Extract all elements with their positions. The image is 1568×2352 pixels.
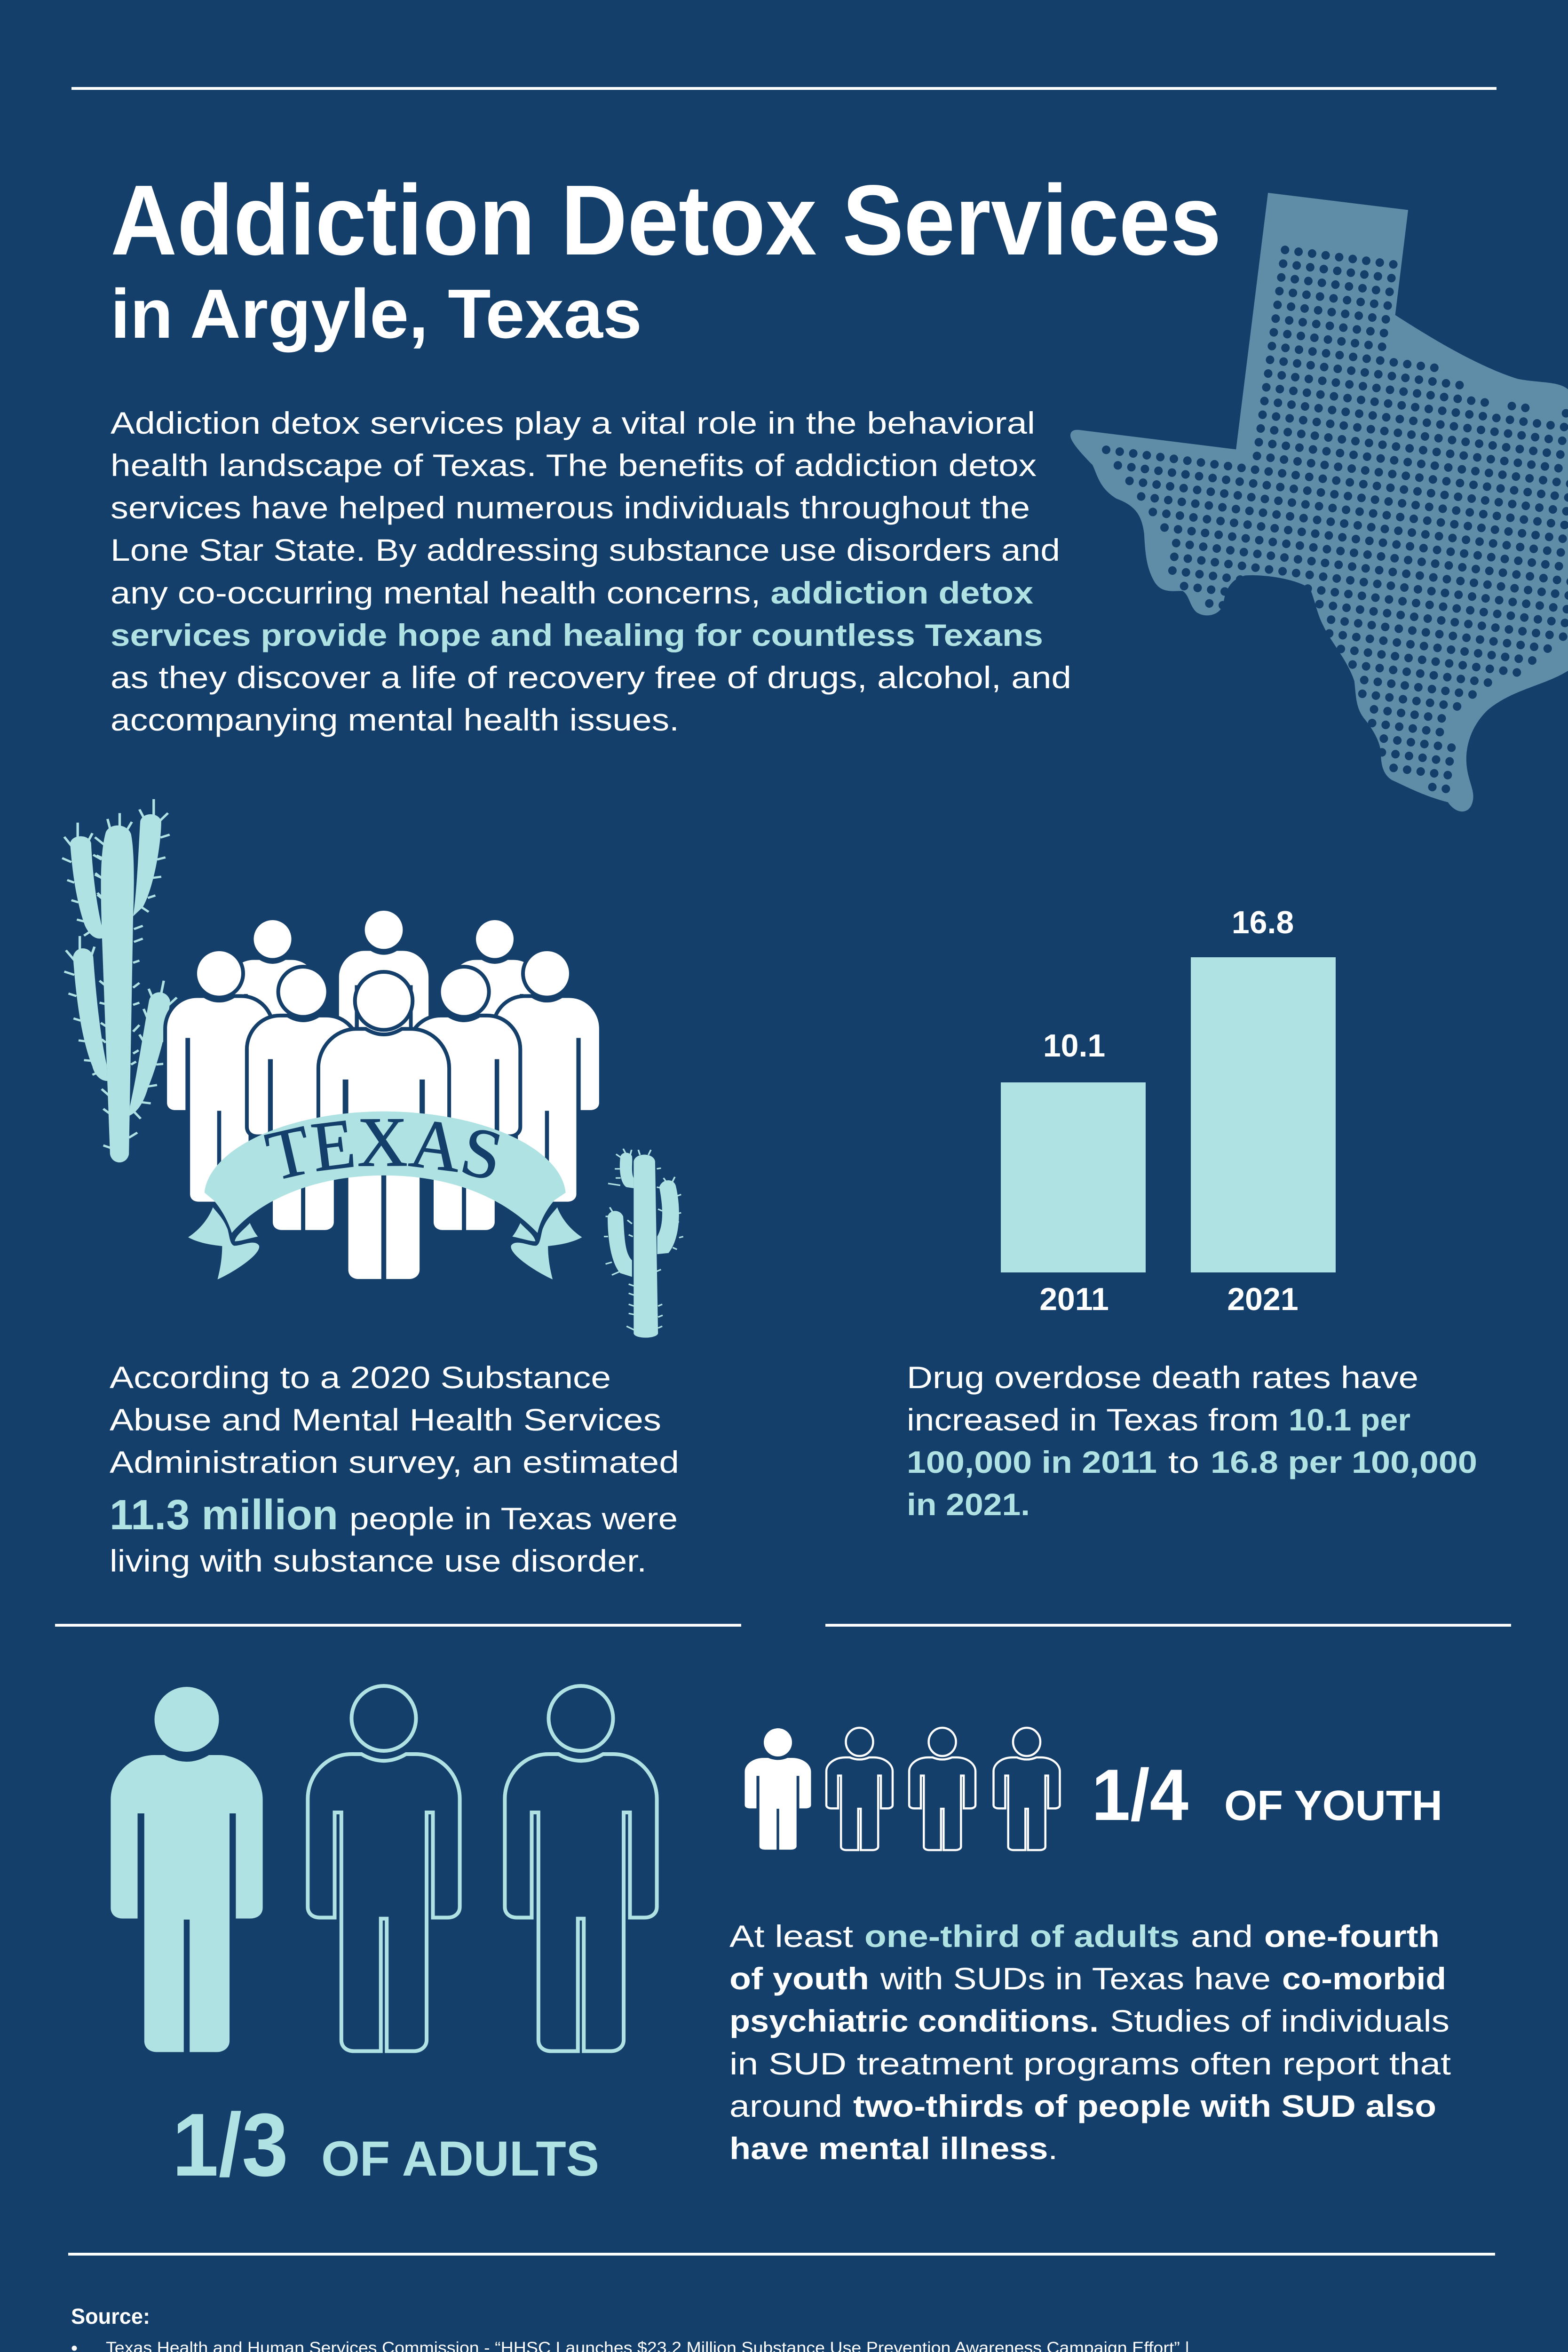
text: co-morbid conditions: one-fourth — [1264, 1919, 1440, 1954]
youth: outline 2 — [909, 1728, 975, 1850]
text: overdose statistic — [907, 1360, 1477, 1522]
intro paragraph: as they discover a life of recovery free of drugs, alcohol, and — [111, 660, 1071, 695]
text: overdose statistic: 16.8 per 100,000 — [1211, 1445, 1477, 1479]
text: co-morbid conditions: At least — [729, 1919, 853, 1954]
youth: filled — [745, 1728, 811, 1850]
value label: 16.8: 16.8 — [1232, 905, 1294, 940]
bar: 2011 — [1001, 1082, 1146, 1272]
text: substance use disorder statistic: 11.3 million — [110, 1492, 338, 1539]
icon: group of people — [167, 911, 599, 1279]
title — [111, 164, 1221, 353]
intro paragraph: services provide hope and healing for countless Texans — [111, 618, 1043, 652]
person: back centre — [339, 911, 428, 1126]
icon: tall cactus — [62, 799, 177, 1162]
text: co-morbid conditions: around — [729, 2089, 842, 2123]
youth: outline 1 — [826, 1728, 893, 1850]
stat: 1/3 of adults — [172, 2095, 599, 2195]
text: overdose statistic: increased in Texas from — [907, 1402, 1279, 1437]
text: substance use disorder statistic: living with substance use disorder. — [110, 1543, 647, 1578]
text: substance use disorder statistic: Administration survey, an estimated — [110, 1445, 679, 1479]
intro paragraph: any co-occurring mental health concerns, addiction detox — [111, 575, 1033, 610]
person: centre — [320, 974, 447, 1279]
axis label: 2021: 2021 — [1227, 1281, 1299, 1317]
text: co-morbid conditions: with SUDs in Texas have — [880, 1961, 1271, 1996]
person: outer left — [167, 951, 271, 1202]
text: co-morbid conditions: psychiatric conditions. — [729, 2003, 1099, 2038]
intro paragraph: health landscape of Texas. The benefits of addiction detox — [111, 448, 1037, 483]
title: Addiction Detox Services — [111, 164, 1221, 276]
person: outer right — [495, 951, 599, 1202]
youth: outline 3 — [994, 1728, 1060, 1850]
bar chart: overdose death rates — [1001, 905, 1336, 1317]
stat: 1/3 of adults: 1/3 — [172, 2095, 288, 2195]
text: co-morbid conditions: in SUD treatment programs often report that — [729, 2046, 1451, 2081]
text: substance use disorder statistic: Abuse and Mental Health Services — [110, 1402, 661, 1437]
banner: Texas ribbon: TEXAS — [260, 1103, 510, 1196]
intro paragraph: services have helped numerous individuals throughout the — [111, 490, 1030, 525]
adult: outline right — [505, 1686, 657, 2051]
text: overdose statistic: Drug overdose death rates have — [907, 1360, 1418, 1395]
text: co-morbid conditions: one-third of adults — [864, 1919, 1180, 1954]
intro paragraph: Addiction detox services play a vital role in the behavioral — [111, 405, 1035, 440]
text: co-morbid conditions: co-morbid — [1282, 1961, 1446, 1996]
intro paragraph — [111, 405, 1071, 737]
text: co-morbid conditions: Studies of individuals — [1110, 2003, 1449, 2038]
text: substance use disorder statistic: According to a 2020 Substance — [110, 1360, 611, 1395]
subtitle: in Argyle, Texas — [111, 275, 642, 353]
value label: 10.1: 10.1 — [1043, 1028, 1105, 1064]
icon: Texas map with dots — [1067, 193, 1568, 811]
bar: 2021 — [1191, 957, 1336, 1272]
person: inner left — [249, 969, 357, 1230]
stat: 1/4 of youth: OF YOUTH — [1224, 1782, 1442, 1829]
stat: 1/4 of youth — [1092, 1754, 1442, 1836]
intro paragraph: accompanying mental health issues. — [111, 702, 679, 737]
text: co-morbid conditions: have mental illness . — [729, 2131, 1058, 2166]
text: overdose statistic: 100,000 in 2011 — [907, 1445, 1157, 1479]
text: co-morbid conditions: two-thirds of people with SUD also — [853, 2089, 1436, 2123]
axis label: 2011: 2011 — [1039, 1281, 1109, 1317]
text: co-morbid conditions: and — [1191, 1919, 1253, 1954]
source list — [71, 2339, 1496, 2352]
stat: 1/4 of youth: 1/4 — [1092, 1754, 1188, 1836]
stat: 1/3 of adults: OF ADULTS — [321, 2131, 599, 2186]
adult: outline middle — [308, 1686, 460, 2051]
intro paragraph: Lone Star State. By addressing substance use disorders and — [111, 532, 1060, 567]
text: overdose statistic: to — [1168, 1445, 1199, 1479]
text: overdose statistic: 10.1 per — [1289, 1402, 1410, 1437]
adult: filled — [111, 1687, 263, 2052]
source heading: Source: — [71, 2304, 150, 2328]
icon: small cactus — [604, 1149, 683, 1338]
person: back left — [228, 920, 317, 1133]
text: substance use disorder statistic: people in Texas were — [349, 1501, 678, 1536]
person: back right — [451, 920, 539, 1133]
icon: one of four youth — [745, 1728, 1060, 1850]
text: co-morbid conditions: of youth — [729, 1961, 869, 1996]
person: inner right — [410, 969, 518, 1230]
text: substance use disorder statistic — [110, 1360, 679, 1578]
text: overdose statistic: in 2021. — [907, 1487, 1030, 1522]
icon: one of three adults — [111, 1686, 657, 2052]
banner: Texas ribbon — [188, 1103, 582, 1279]
text: co-morbid conditions — [729, 1919, 1451, 2166]
